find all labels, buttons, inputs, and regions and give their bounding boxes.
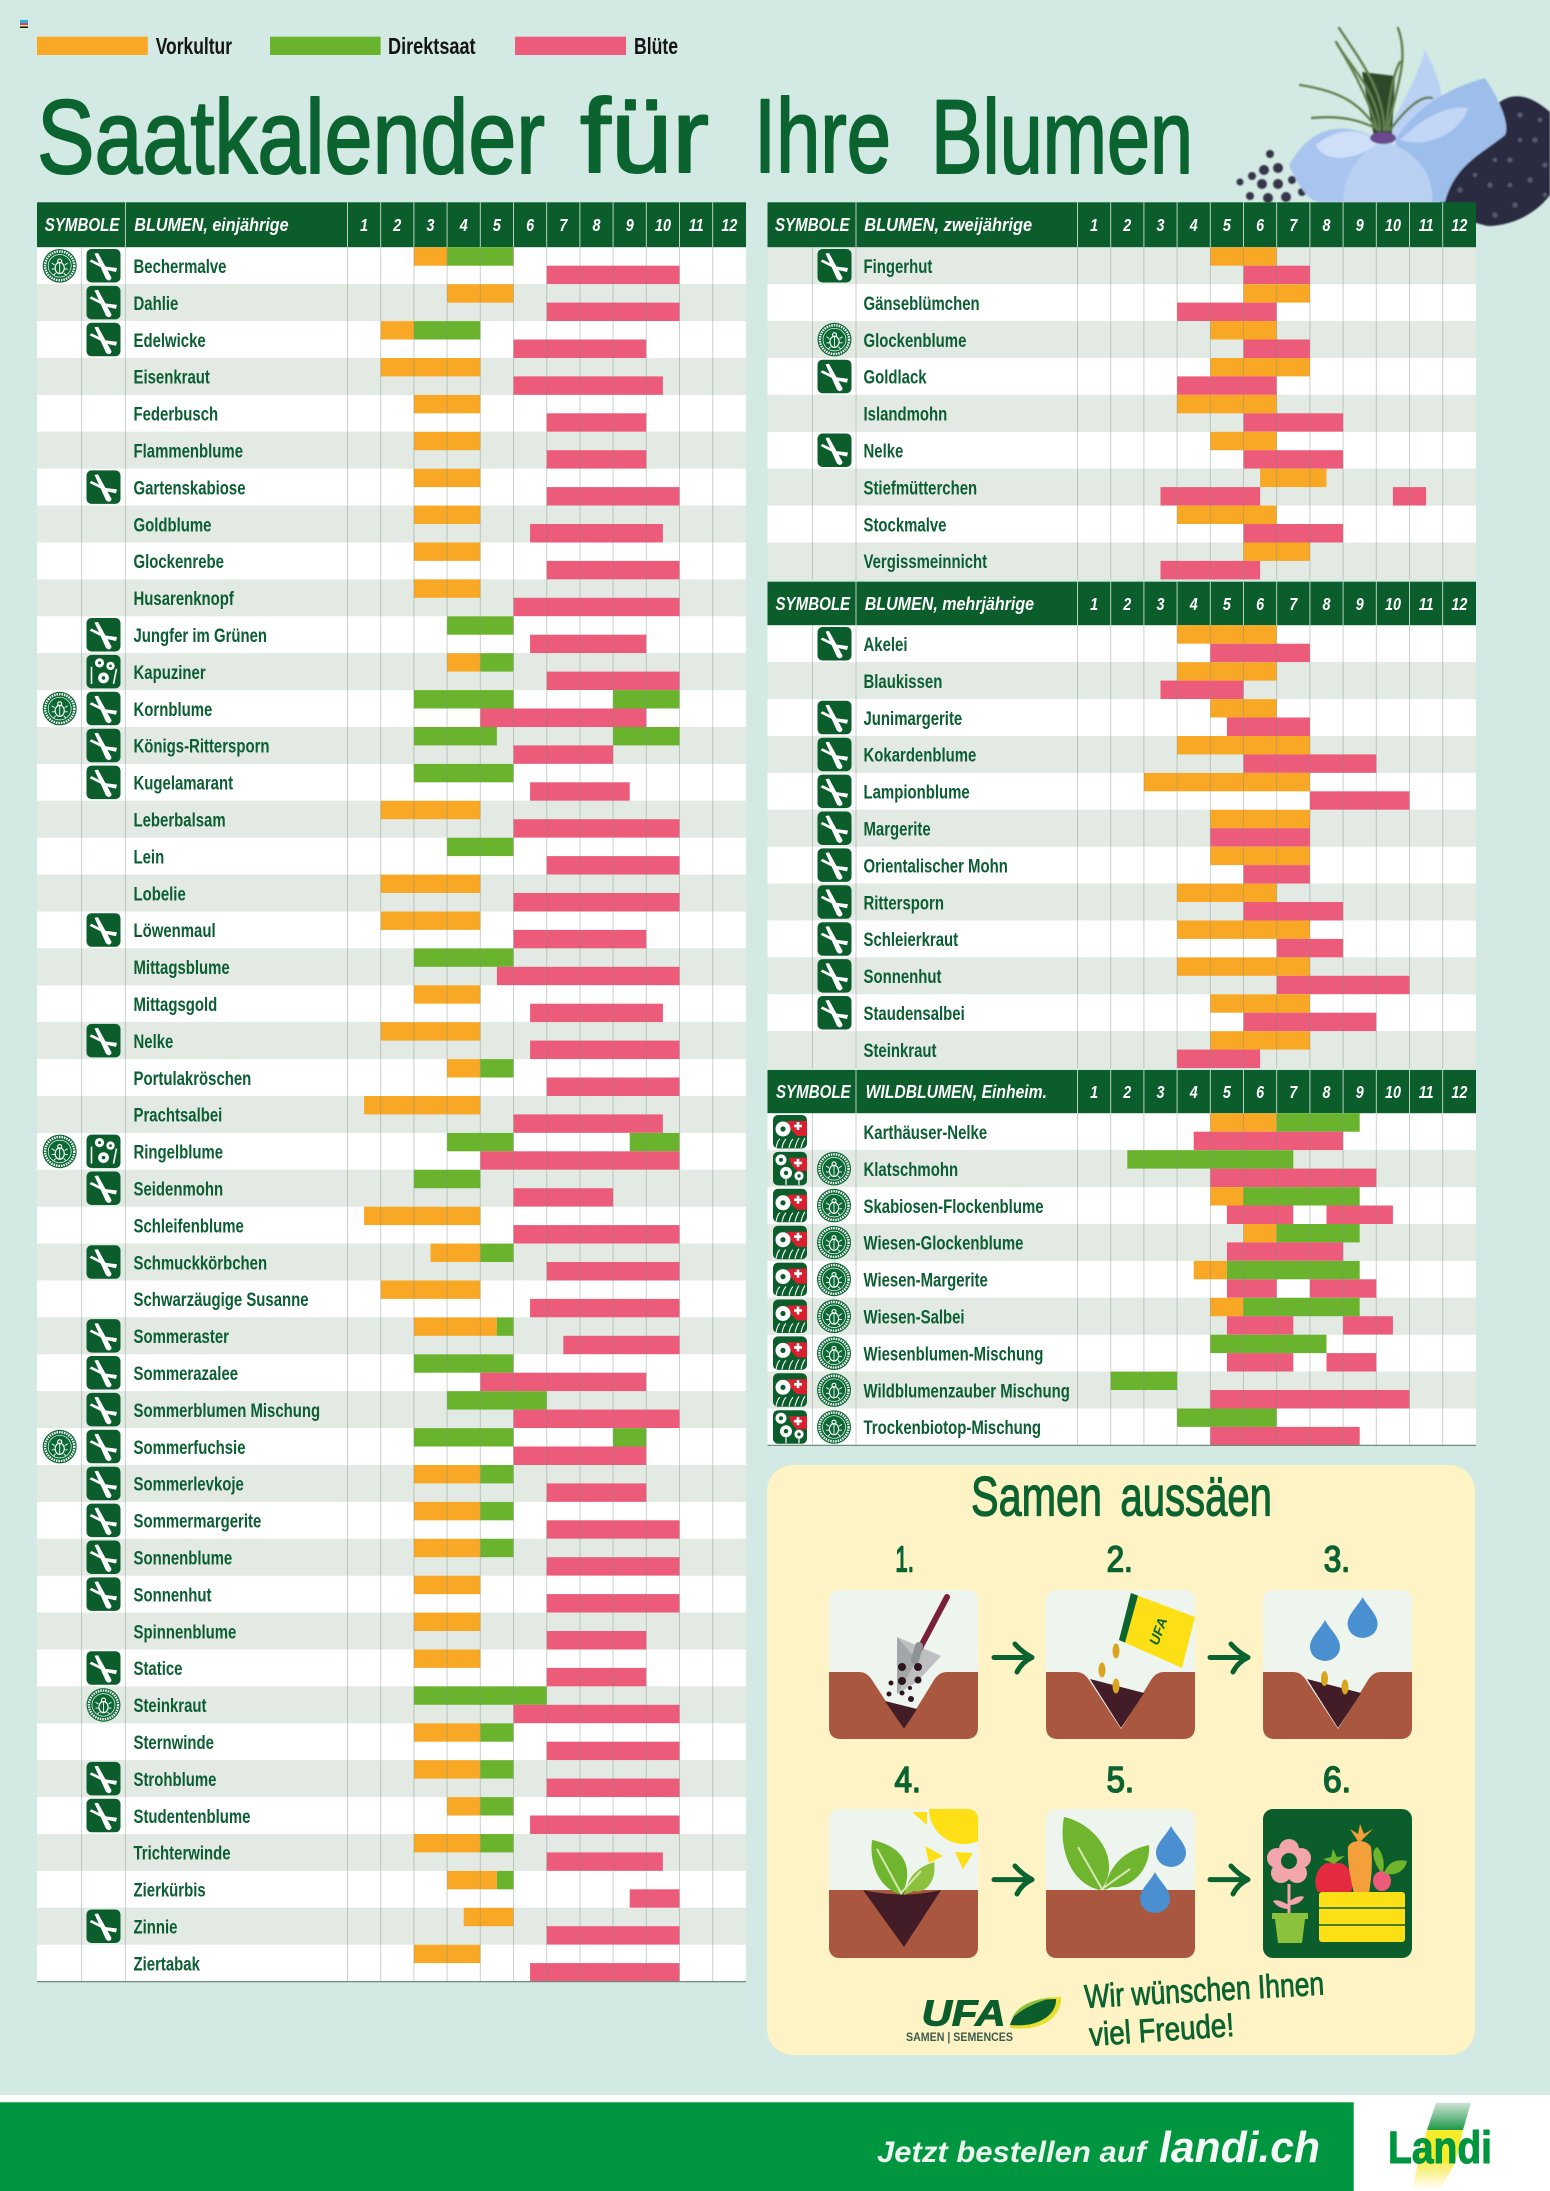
- row: Sommermargerite: Sommermargerite: [134, 1510, 262, 1532]
- table header: BLUMEN, einjährige: [134, 215, 289, 235]
- row: Sommerblumen Mischung: [37, 1391, 746, 1428]
- table header: [768, 1070, 1476, 1113]
- row: Sonnenblume: Sonnenblume: [134, 1547, 232, 1569]
- table header: BLUMEN, zweijährige: [864, 215, 1032, 235]
- row: Vergissmeinnicht: [768, 542, 1476, 579]
- row: Strohblume: Strohblume: [134, 1768, 217, 1790]
- row: Strohblume: [37, 1760, 746, 1797]
- table header: 2: [1122, 217, 1131, 235]
- row: Nelke: Nelke: [864, 440, 904, 462]
- row: Lobelie: [37, 875, 746, 912]
- table header: 12: [721, 217, 737, 235]
- row: Fingerhut: [768, 247, 1476, 284]
- table header: SYMBOLE: [776, 594, 851, 614]
- row: Flammenblume: Flammenblume: [134, 440, 243, 462]
- table header: 12: [1451, 217, 1467, 235]
- row: Prachtsalbei: [37, 1096, 746, 1133]
- row: Glockenblume: [768, 321, 1476, 358]
- row: Edelwicke: [37, 321, 746, 358]
- greeting text: viel Freude!: [1088, 2006, 1235, 2053]
- row: Islandmohn: [768, 395, 1476, 432]
- row: Kokardenblume: Kokardenblume: [864, 744, 977, 766]
- row: Sommerlevkoje: Sommerlevkoje: [134, 1473, 244, 1495]
- heading: Samen aussäen: Samen: [971, 1464, 1102, 1528]
- arrow: [994, 1644, 1032, 1672]
- banner: order online: [0, 2095, 1550, 2191]
- table header: 1: [1090, 1084, 1098, 1102]
- table header: 2: [392, 217, 401, 235]
- row: Wildblumenzauber Mischung: Wildblumenzauber Mischung: [864, 1379, 1070, 1402]
- row: Stockmalve: [768, 506, 1476, 542]
- row: Margerite: [768, 810, 1476, 847]
- row: Dahlie: [37, 284, 746, 321]
- row: Glockenrebe: [37, 542, 746, 579]
- table header: 10: [1385, 217, 1401, 235]
- row: Mittagsblume: Mittagsblume: [134, 956, 230, 979]
- row: Sommerazalee: [37, 1354, 746, 1391]
- row: Sommeraster: Sommeraster: [134, 1325, 229, 1348]
- heading: Samen aussäen: [971, 1464, 1272, 1528]
- row: Spinnenblume: Spinnenblume: [134, 1620, 237, 1643]
- row: Trichterwinde: [37, 1834, 746, 1871]
- row: Blaukissen: Blaukissen: [864, 670, 942, 692]
- row: Lobelie: Lobelie: [134, 882, 186, 905]
- logo: Landi: [1388, 2103, 1492, 2190]
- row: Wiesen-Glockenblume: Wiesen-Glockenblume: [864, 1232, 1024, 1254]
- step number 2: 2.: [1107, 1538, 1133, 1579]
- row: Klatschmohn: Klatschmohn: [864, 1158, 958, 1180]
- table header: BLUMEN, mehrjährige: [865, 594, 1034, 614]
- table header: 4: [1189, 1084, 1198, 1102]
- row: Rittersporn: [768, 884, 1476, 920]
- row: Skabiosen-Flockenblume: [768, 1187, 1476, 1224]
- table header: 1: [1090, 217, 1098, 235]
- table header: SYMBOLE: [45, 215, 120, 235]
- row: Studentenblume: Studentenblume: [134, 1805, 251, 1827]
- table header: SYMBOLE: [776, 1082, 851, 1102]
- row: Leberbalsam: [37, 801, 746, 838]
- row: Lein: [37, 838, 746, 875]
- row: Fingerhut: Fingerhut: [864, 255, 933, 277]
- row: Ringelblume: Ringelblume: [134, 1141, 223, 1163]
- table header: 6: [526, 217, 534, 235]
- table header: 4: [459, 217, 468, 235]
- row: Portulakröschen: [37, 1059, 746, 1096]
- row: Prachtsalbei: Prachtsalbei: [134, 1104, 222, 1126]
- row: Gartenskabiose: [37, 469, 746, 506]
- row: Federbusch: Federbusch: [134, 403, 218, 425]
- row: Akelei: Akelei: [864, 633, 907, 655]
- row: Wiesen-Salbei: [768, 1298, 1476, 1335]
- table header: 3: [1156, 217, 1165, 235]
- row: Schleifenblume: [37, 1207, 746, 1244]
- row: Kornblume: Kornblume: [134, 698, 213, 720]
- row: Mittagsgold: [37, 985, 746, 1022]
- table header: [768, 202, 1476, 247]
- legend: Vorkultur: [156, 33, 232, 59]
- row: Sternwinde: Sternwinde: [134, 1731, 214, 1753]
- row: Mittagsblume: [37, 948, 746, 985]
- table header: 5: [1223, 217, 1232, 235]
- table header: 7: [1289, 596, 1298, 614]
- legend: [37, 33, 678, 59]
- arrow: [994, 1866, 1032, 1894]
- table header: 1: [360, 217, 368, 235]
- row: Sommerazalee: Sommerazalee: [134, 1362, 238, 1384]
- table header: 6: [1256, 1084, 1264, 1102]
- row: Goldblume: [37, 506, 746, 542]
- row: Goldlack: Goldlack: [864, 366, 927, 388]
- row: Sommeraster: [37, 1317, 746, 1354]
- row: Lampionblume: [768, 773, 1476, 810]
- table header: 2: [1122, 1084, 1131, 1102]
- table header: SYMBOLE: [775, 215, 850, 235]
- legend: Direktsaat: [388, 33, 476, 59]
- row: Königs-Rittersporn: [37, 727, 746, 764]
- row: Seidenmohn: [37, 1170, 746, 1207]
- row: Zierkürbis: Zierkürbis: [134, 1879, 206, 1901]
- row: Wiesen-Margerite: [768, 1261, 1476, 1298]
- row: Wiesen-Margerite: Wiesen-Margerite: [864, 1269, 988, 1291]
- table header: 9: [1356, 1084, 1364, 1102]
- table header: 10: [1385, 1084, 1401, 1102]
- row: Schmuckkörbchen: [37, 1244, 746, 1280]
- table header: 5: [1223, 596, 1232, 614]
- row: Trichterwinde: Trichterwinde: [134, 1842, 231, 1864]
- title: [37, 78, 1193, 196]
- row: Löwenmaul: Löwenmaul: [134, 919, 216, 942]
- row: Eisenkraut: [37, 358, 746, 395]
- row: Schleierkraut: [768, 920, 1476, 957]
- row: Kugelamarant: [37, 764, 746, 801]
- row: Mittagsgold: Mittagsgold: [134, 993, 217, 1015]
- row: Gartenskabiose: Gartenskabiose: [134, 476, 246, 499]
- table header: 2: [1122, 596, 1131, 614]
- row: Ziertabak: [37, 1945, 746, 1982]
- row: Goldlack: [768, 358, 1476, 395]
- row: Glockenrebe: Glockenrebe: [134, 550, 224, 573]
- row: Eisenkraut: Eisenkraut: [134, 366, 210, 388]
- table header: 7: [1289, 217, 1298, 235]
- row: Studentenblume: [37, 1797, 746, 1834]
- row: Wildblumenzauber Mischung: [768, 1372, 1476, 1408]
- row: Husarenknopf: [37, 579, 746, 616]
- greeting text: Wir wünschen Ihnen: [1083, 1965, 1325, 2015]
- table header: 10: [1385, 596, 1401, 614]
- row: Stockmalve: Stockmalve: [864, 513, 947, 536]
- table header: 6: [1256, 217, 1264, 235]
- table header: 9: [1356, 217, 1364, 235]
- row: Schleifenblume: Schleifenblume: [134, 1214, 244, 1237]
- row: Junimargerite: [768, 699, 1476, 736]
- icon: step 2 sow seeds: [1046, 1590, 1195, 1739]
- row: Husarenknopf: Husarenknopf: [134, 587, 234, 610]
- row: Kornblume: [37, 690, 746, 727]
- icon: step 5 growing plant: [1046, 1809, 1195, 1958]
- row: Statice: [37, 1650, 746, 1686]
- row: Karthäuser-Nelke: Karthäuser-Nelke: [864, 1121, 987, 1143]
- row: Lein: Lein: [134, 845, 164, 868]
- icon: step 3 water: [1263, 1590, 1412, 1739]
- row: Seidenmohn: Seidenmohn: [134, 1178, 223, 1200]
- row: Königs-Rittersporn: Königs-Rittersporn: [134, 735, 270, 757]
- table header: 6: [1256, 596, 1264, 614]
- row: Zinnie: Zinnie: [134, 1916, 178, 1938]
- row: Staudensalbei: [768, 994, 1476, 1031]
- row: Sommerblumen Mischung: Sommerblumen Mischung: [134, 1399, 320, 1421]
- row: Trockenbiotop-Mischung: [768, 1408, 1476, 1445]
- step number 5: 5.: [1107, 1759, 1134, 1800]
- row: Karthäuser-Nelke: [768, 1113, 1476, 1150]
- greeting text: [1083, 1965, 1325, 2053]
- logo: Landi: Landi: [1388, 2122, 1492, 2173]
- photo: nigella flower with black seeds: [1236, 28, 1550, 226]
- row: Nelke: [37, 1022, 746, 1059]
- table header: 4: [1189, 217, 1198, 235]
- table header: 7: [1289, 1084, 1298, 1102]
- row: Skabiosen-Flockenblume: Skabiosen-Flockenblume: [864, 1195, 1044, 1217]
- logo: UFA Samen Semences: SAMEN | SEMENCES: [906, 2030, 1013, 2044]
- row: Sonnenhut: [37, 1576, 746, 1613]
- row: Jungfer im Grünen: [37, 616, 746, 653]
- row: Nelke: Nelke: [134, 1030, 174, 1052]
- row: Nelke: [768, 432, 1476, 469]
- row: Trockenbiotop-Mischung: Trockenbiotop-Mischung: [864, 1416, 1041, 1439]
- table header: 8: [593, 217, 601, 235]
- row: Sonnenhut: [768, 957, 1476, 994]
- row: Steinkraut: [768, 1031, 1476, 1068]
- row: Dahlie: Dahlie: [134, 292, 179, 314]
- row: Steinkraut: Steinkraut: [134, 1694, 207, 1717]
- row: Sommerfuchsie: [37, 1428, 746, 1465]
- table header: 10: [655, 217, 671, 235]
- row: Orientalischer Mohn: [768, 847, 1476, 884]
- row: Islandmohn: Islandmohn: [864, 403, 947, 425]
- step number 3: 3.: [1324, 1538, 1350, 1579]
- icon: step 6 harvest: [1263, 1809, 1412, 1958]
- table header: 12: [1451, 1084, 1467, 1102]
- icon: step 4 sprout and sun: [829, 1809, 978, 1958]
- logo: UFA Samen Semences: UFA: [922, 1992, 1006, 2034]
- row: Bechermalve: [37, 247, 746, 284]
- row: Leberbalsam: Leberbalsam: [134, 809, 226, 831]
- row: Zinnie: [37, 1908, 746, 1945]
- logo: UFA Samen Semences: [906, 1992, 1061, 2044]
- arrow: [1210, 1644, 1248, 1672]
- row: Flammenblume: [37, 432, 746, 469]
- row: Wiesenblumen-Mischung: Wiesenblumen-Mischung: [864, 1342, 1043, 1365]
- table header: [37, 202, 746, 247]
- icon: step 1 dig furrow: [829, 1590, 978, 1739]
- step number 6: 6.: [1323, 1759, 1351, 1800]
- row: Stiefmütterchen: [768, 469, 1476, 506]
- row: Klatschmohn: [768, 1150, 1476, 1187]
- table header: WILDBLUMEN, Einheim.: [866, 1082, 1047, 1102]
- row: Kapuziner: [37, 653, 746, 690]
- row: Sommermargerite: [37, 1502, 746, 1539]
- row: Bechermalve: Bechermalve: [134, 255, 227, 277]
- row: Portulakröschen: Portulakröschen: [134, 1067, 251, 1089]
- row: Rittersporn: Rittersporn: [864, 891, 944, 914]
- row: Margerite: Margerite: [864, 818, 931, 840]
- row: Sonnenblume: [37, 1539, 746, 1576]
- row: Zierkürbis: [37, 1871, 746, 1908]
- row: Edelwicke: Edelwicke: [134, 329, 206, 351]
- table header: 8: [1323, 217, 1331, 235]
- row: Vergissmeinnicht: Vergissmeinnicht: [864, 550, 987, 573]
- table header: 3: [1156, 596, 1165, 614]
- row: Sonnenhut: Sonnenhut: [134, 1583, 212, 1606]
- table header: 1: [1090, 596, 1098, 614]
- row: Kapuziner: Kapuziner: [134, 661, 206, 683]
- title: für: [580, 78, 709, 195]
- row: Wiesen-Salbei: Wiesen-Salbei: [864, 1306, 965, 1328]
- row: Sternwinde: [37, 1723, 746, 1760]
- printer colour mark: [20, 20, 28, 28]
- table header: 3: [426, 217, 435, 235]
- row: Schleierkraut: Schleierkraut: [864, 928, 958, 951]
- banner text: landi.ch: [1159, 2123, 1320, 2172]
- row: Kugelamarant: Kugelamarant: [134, 772, 233, 794]
- table header: 11: [1419, 1084, 1434, 1102]
- row: Ringelblume: [37, 1133, 746, 1170]
- legend: Blüte: [634, 33, 678, 59]
- icon: step 2 sow seeds: UFA: [1146, 1615, 1170, 1647]
- row: Gänseblümchen: Gänseblümchen: [864, 292, 980, 314]
- row: Goldblume: Goldblume: [134, 513, 212, 536]
- table: Blumen, zweijährige: [768, 202, 1476, 579]
- banner text: Jetzt bestellen auf: [877, 2136, 1149, 2169]
- table: Blumen, mehrjährige: [768, 582, 1476, 1068]
- table header: 5: [493, 217, 502, 235]
- table header: 8: [1323, 596, 1331, 614]
- row: Blaukissen: [768, 662, 1476, 699]
- row: Schmuckkörbchen: Schmuckkörbchen: [134, 1251, 267, 1274]
- row: Steinkraut: [37, 1686, 746, 1723]
- row: Wiesenblumen-Mischung: [768, 1335, 1476, 1372]
- row: Federbusch: [37, 395, 746, 432]
- row: Sommerlevkoje: [37, 1465, 746, 1502]
- title: Saatkalender: [37, 79, 545, 196]
- table: Blumen, einjährige: [37, 202, 746, 1982]
- row: Junimargerite: Junimargerite: [864, 707, 963, 729]
- table: Wildblumen, Einheim.: [768, 1070, 1476, 1445]
- row: Schwarzäugige Susanne: Schwarzäugige Susanne: [134, 1288, 309, 1311]
- step number 4: 4.: [894, 1759, 921, 1800]
- row: Gänseblümchen: [768, 284, 1476, 321]
- row: Steinkraut: Steinkraut: [864, 1039, 937, 1061]
- table header: 3: [1156, 1084, 1165, 1102]
- row: Jungfer im Grünen: Jungfer im Grünen: [134, 624, 267, 646]
- row: Akelei: [768, 625, 1476, 662]
- table header: 8: [1323, 1084, 1331, 1102]
- table header: 12: [1451, 596, 1467, 614]
- table header: 7: [559, 217, 568, 235]
- table header: 4: [1189, 596, 1198, 614]
- table header: 11: [1419, 217, 1434, 235]
- arrow: [1210, 1866, 1248, 1894]
- row: Ziertabak: Ziertabak: [134, 1952, 200, 1975]
- row: Spinnenblume: [37, 1613, 746, 1650]
- panel: Samen aussäen: [767, 1464, 1475, 2055]
- step number 1: 1.: [895, 1538, 914, 1579]
- table header: 9: [626, 217, 634, 235]
- table header: 9: [1356, 596, 1364, 614]
- row: Löwenmaul: [37, 912, 746, 948]
- row: Lampionblume: Lampionblume: [864, 781, 970, 803]
- row: Orientalischer Mohn: Orientalischer Mohn: [864, 854, 1008, 877]
- table header: [768, 582, 1476, 625]
- heading: Samen aussäen: aussäen: [1120, 1464, 1272, 1528]
- row: Sonnenhut: Sonnenhut: [864, 965, 942, 988]
- row: Kokardenblume: [768, 736, 1476, 773]
- row: Glockenblume: Glockenblume: [864, 329, 967, 351]
- row: Schwarzäugige Susanne: [37, 1280, 746, 1317]
- row: Statice: Statice: [134, 1657, 183, 1680]
- banner text: [877, 2123, 1320, 2172]
- table header: 5: [1223, 1084, 1232, 1102]
- title: Ihre: [754, 78, 891, 195]
- table header: 11: [689, 217, 704, 235]
- row: Sommerfuchsie: Sommerfuchsie: [134, 1436, 246, 1458]
- row: Staudensalbei: Staudensalbei: [864, 1002, 965, 1024]
- table header: 11: [1419, 596, 1434, 614]
- row: Wiesen-Glockenblume: [768, 1224, 1476, 1261]
- row: Stiefmütterchen: Stiefmütterchen: [864, 476, 977, 499]
- title: Blumen: [931, 79, 1193, 196]
